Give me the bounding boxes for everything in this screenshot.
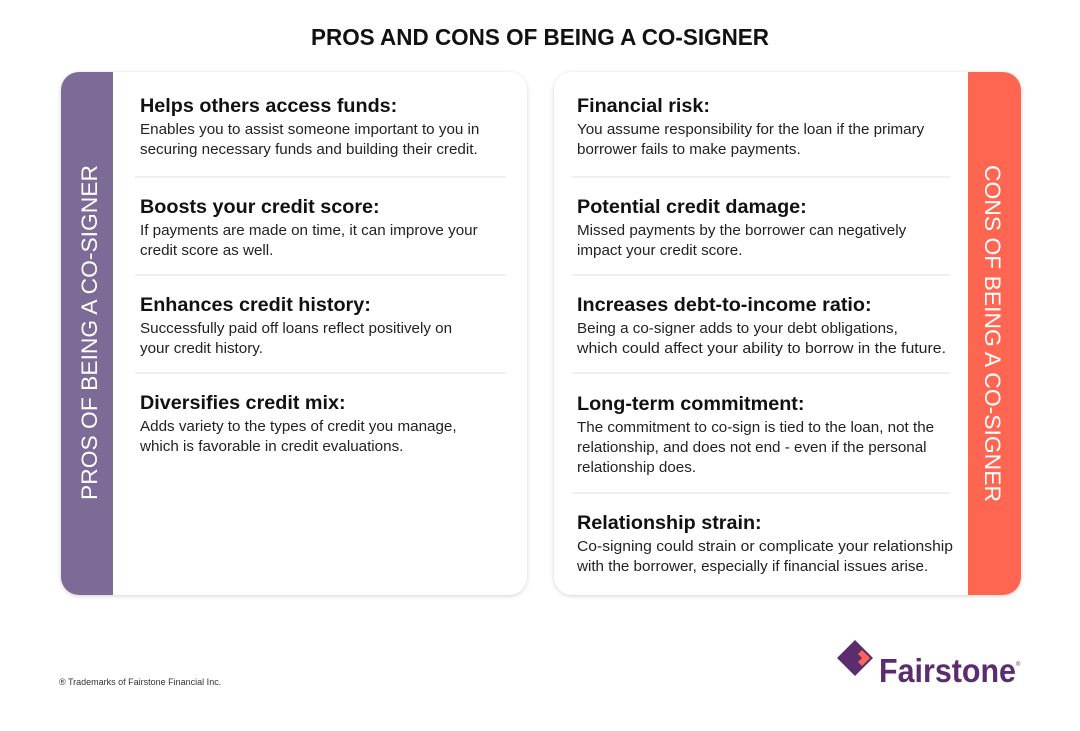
pro item 2: Boosts your credit score: — [140, 196, 380, 218]
con item 5: with the borrower, especially if financial issues arise. — [576, 558, 928, 575]
pro item 4: which is favorable in credit evaluations. — [139, 438, 403, 455]
con item 3: which could affect your ability to borrow in the future. — [576, 340, 946, 357]
con item 4: The commitment to co-sign is tied to the loan, not the — [577, 419, 934, 436]
logo: Fairstone — [879, 652, 1016, 689]
pros side band — [61, 72, 113, 595]
panel: cons — [554, 72, 1021, 595]
pro item 4: Adds variety to the types of credit you manage, — [140, 418, 457, 435]
pro item 4: Diversifies credit mix: — [140, 392, 346, 414]
pro item 3: Enhances credit history: — [140, 294, 371, 316]
pro item 1: Helps others access funds: — [140, 95, 397, 117]
panel: pros — [61, 72, 527, 595]
title: PROS AND CONS OF BEING A CO-SIGNER — [311, 24, 769, 50]
pro item 3: your credit history. — [140, 340, 263, 357]
con item 2: Potential credit damage: — [577, 196, 807, 218]
con item 2: Missed payments by the borrower can negatively — [577, 222, 907, 239]
pro item 2: credit score as well. — [140, 242, 273, 259]
con item 1 — [577, 95, 925, 158]
pro item 1: securing necessary funds and building their credit. — [140, 141, 478, 158]
con item 2: impact your credit score. — [577, 242, 742, 259]
con item 5: Co-signing could strain or complicate your relationship — [577, 538, 953, 555]
pro item 2 — [140, 196, 478, 259]
con item 3: Increases debt-to-income ratio: — [577, 294, 872, 316]
pros vertical label: PROS OF BEING A CO-SIGNER — [77, 165, 102, 500]
pro item 4 — [139, 392, 457, 455]
pro item 2: If payments are made on time, it can improve your — [140, 222, 478, 239]
pro item 3: Successfully paid off loans reflect positively on — [140, 320, 452, 337]
logo — [837, 640, 1021, 689]
pro item 1 — [140, 95, 479, 158]
con item 1: borrower fails to make payments. — [577, 141, 801, 158]
pro item 1: Enables you to assist someone important to you in — [140, 121, 479, 138]
con item 5: Relationship strain: — [577, 512, 762, 534]
footnote: ® Trademarks of Fairstone Financial Inc. — [59, 677, 221, 687]
con item 1: You assume responsibility for the loan if the primary — [577, 121, 925, 138]
con item 4: relationship does. — [577, 459, 696, 476]
pro item 3 — [140, 294, 452, 357]
con item 1: Financial risk: — [577, 95, 710, 117]
con item 4 — [577, 393, 934, 476]
con item 5 — [576, 512, 953, 575]
cons vertical label: CONS OF BEING A CO-SIGNER — [980, 165, 1005, 502]
icon: diamond — [837, 640, 873, 676]
con item 3: Being a co-signer adds to your debt obligations, — [577, 320, 898, 337]
cons side band — [968, 72, 1021, 595]
con item 3 — [576, 294, 946, 357]
con item 4: Long-term commitment: — [577, 393, 804, 415]
con item 4: relationship, and does not end - even if the personal — [577, 439, 927, 456]
con item 2 — [577, 196, 907, 259]
logo: ® — [1016, 661, 1021, 668]
